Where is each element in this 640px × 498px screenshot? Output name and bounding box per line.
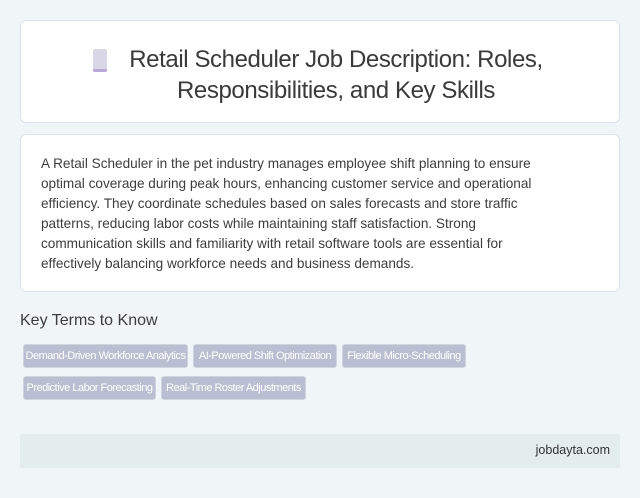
tag: Predictive Labor Forecasting <box>26 382 152 394</box>
title: Responsibilities, and Key Skills <box>177 77 495 104</box>
tag: Flexible Micro-Scheduling <box>347 350 461 362</box>
icon: document <box>93 49 107 72</box>
description card <box>20 134 620 292</box>
tag: Real-Time Roster Adjustments <box>166 382 301 394</box>
tag <box>342 344 466 368</box>
title <box>129 46 543 104</box>
heading: key terms: Key Terms to Know <box>20 312 158 329</box>
title: Retail Scheduler Job Description: Roles, <box>129 46 543 73</box>
tag: AI-Powered Shift Optimization <box>199 350 331 362</box>
tag <box>193 344 337 368</box>
tag <box>161 376 306 400</box>
description text: A Retail Scheduler in the pet industry manages employee shift planning to ensure optimal coverage during peak hours, enhancing customer service and operational efficiency. They coordinate schedules based on sales forecasts and store traffic patterns, reducing labor costs while maintaining staff satisfaction. Strong communication skills and familiarity with retail software tools are essential for effectively balancing workforce needs and business demands. <box>41 156 531 271</box>
footer <box>20 434 620 468</box>
header card <box>20 20 620 123</box>
footer text: jobdayta.com <box>536 443 610 457</box>
tag: Demand-Driven Workforce Analytics <box>26 350 185 362</box>
tag <box>23 376 156 400</box>
tag <box>23 344 188 368</box>
